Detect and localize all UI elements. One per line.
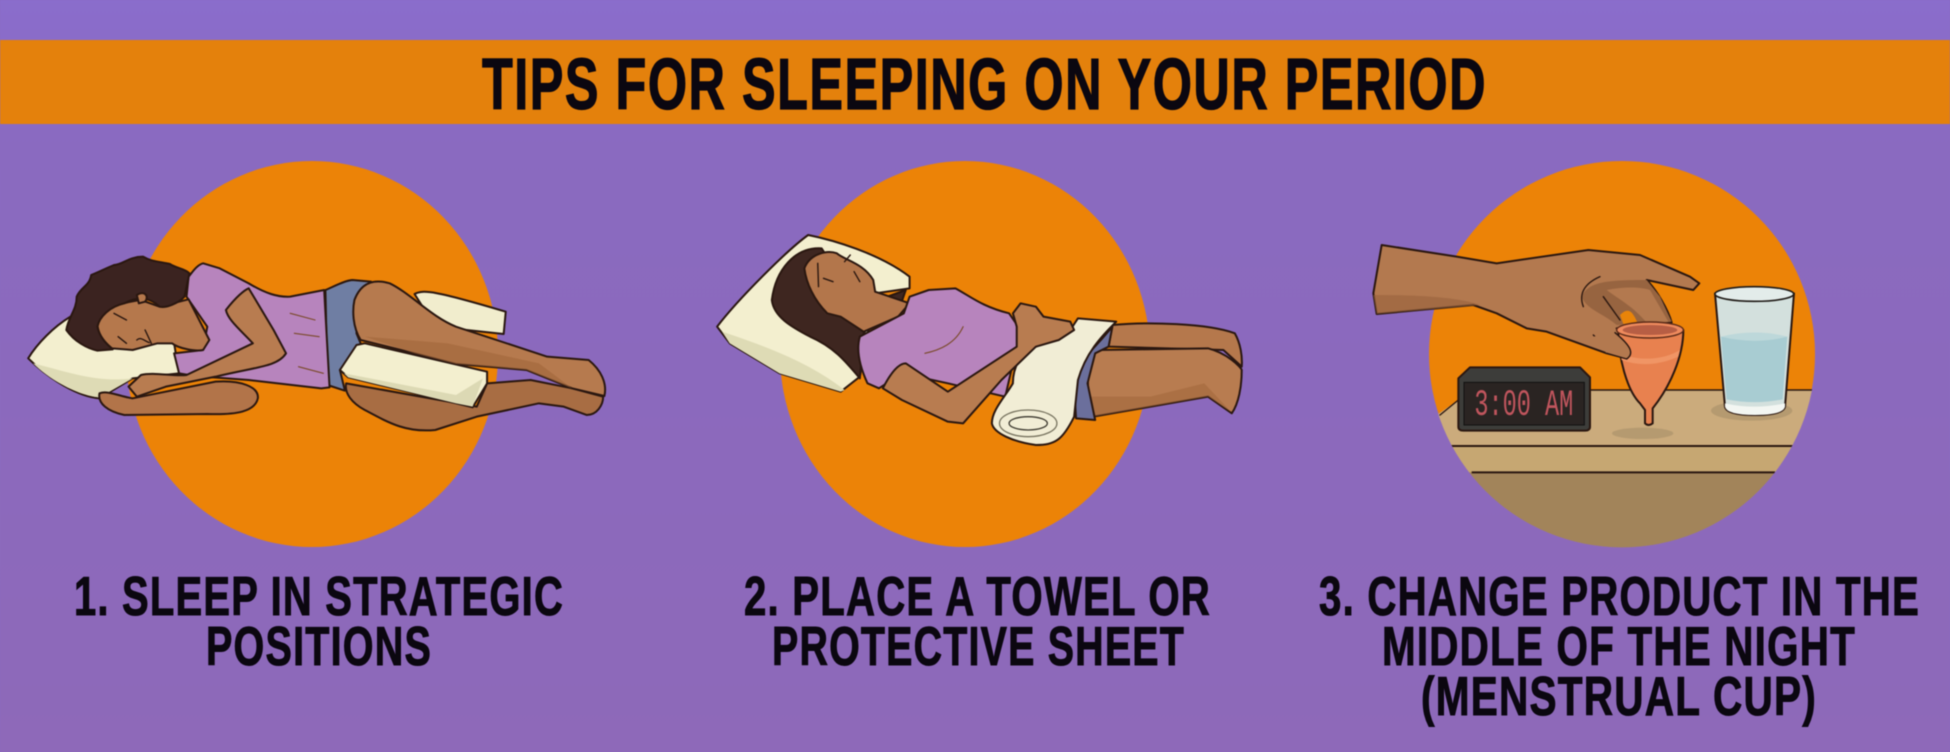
panel: strategic sleep positions (28, 161, 605, 677)
caption 2: 2. PLACE A TOWEL OR (744, 565, 1211, 627)
orange circle 3 (1429, 161, 1815, 547)
illustration: hand, cup, clock and water glass on nightstand (1373, 245, 1823, 552)
orange circle 1 (126, 161, 498, 547)
rolled towel (992, 318, 1116, 445)
hair (66, 257, 189, 351)
clock time: 3:00 AM (1474, 385, 1573, 427)
orange circle 2 (780, 161, 1150, 547)
caption 3 (1319, 565, 1920, 727)
alarm clock (1458, 367, 1590, 431)
hand reaching (1373, 245, 1699, 358)
glass shadow (1711, 401, 1792, 421)
hair (772, 248, 906, 378)
caption 2 (744, 565, 1211, 677)
caption 1: 1. SLEEP IN STRATEGIC (74, 565, 564, 627)
caption 1 (74, 565, 564, 677)
caption 2: PROTECTIVE SHEET (772, 615, 1185, 677)
title: TIPS FOR SLEEPING ON YOUR PERIOD (482, 45, 1487, 125)
title banner (0, 40, 1950, 125)
caption 3: (MENSTRUAL CUP) (1421, 665, 1817, 727)
nightstand (1437, 390, 1823, 552)
panel: change product at night (1319, 161, 1920, 727)
face features (114, 313, 151, 343)
thumb (1593, 333, 1631, 359)
cup shadow (1612, 428, 1673, 439)
panel: towel or protective sheet (717, 161, 1242, 677)
menstrual cup (1617, 322, 1683, 425)
caption 1: POSITIONS (206, 615, 432, 677)
illustration: woman sleeping on her side with pillows (28, 257, 605, 430)
illustration: woman on her back with rolled towel (717, 235, 1242, 445)
glass of water (1715, 287, 1794, 415)
